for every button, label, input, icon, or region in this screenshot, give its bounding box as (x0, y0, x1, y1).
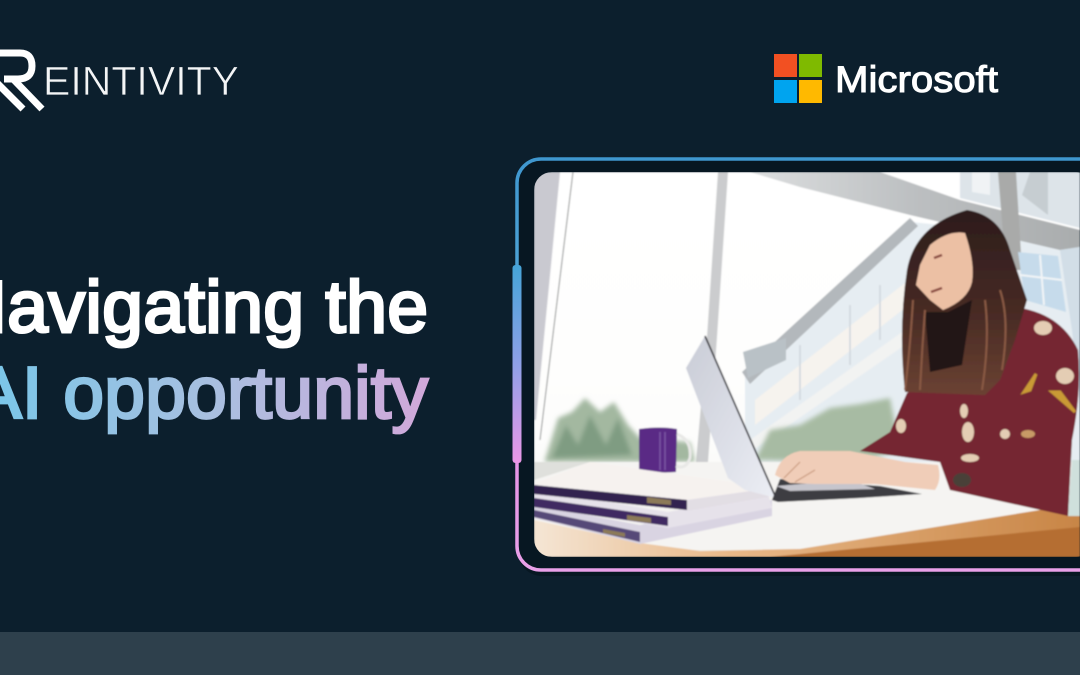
window frames (534, 172, 728, 462)
frame accent bar (512, 265, 522, 463)
woman: hair (902, 210, 1027, 395)
footer band (0, 632, 1080, 675)
woman: right side detail (1068, 460, 1080, 516)
wood table edge (534, 510, 1080, 557)
microsoft squares (774, 54, 822, 103)
trees right (755, 398, 900, 462)
title (0, 267, 428, 434)
logo: Microsoft (774, 54, 999, 103)
laptop (686, 336, 922, 502)
woman: face (916, 232, 973, 310)
table (593, 462, 1071, 500)
frame shadow (518, 160, 1080, 576)
books (534, 462, 772, 544)
woman: arm and hand (775, 451, 939, 490)
building (742, 172, 1080, 462)
woman: eye and lips (931, 255, 942, 292)
trees left (545, 398, 695, 462)
logo: Reintivity (0, 53, 239, 109)
logo wordmark: EINTIVITY (43, 58, 239, 104)
image frame (512, 159, 1080, 576)
logo mark: R (0, 53, 42, 109)
mug (639, 428, 690, 473)
microsoft wordmark: Microsoft (835, 59, 999, 100)
woman: blouse (860, 307, 1079, 516)
woman: blouse pattern (896, 321, 1075, 487)
woman: hair strands (905, 290, 1006, 390)
sky (534, 172, 1080, 557)
photo: woman working on laptop (534, 172, 1080, 557)
woman: neck shadow (925, 300, 972, 372)
window ledge (534, 462, 590, 480)
woman: fingers (784, 462, 815, 482)
frame outline (517, 159, 1080, 570)
